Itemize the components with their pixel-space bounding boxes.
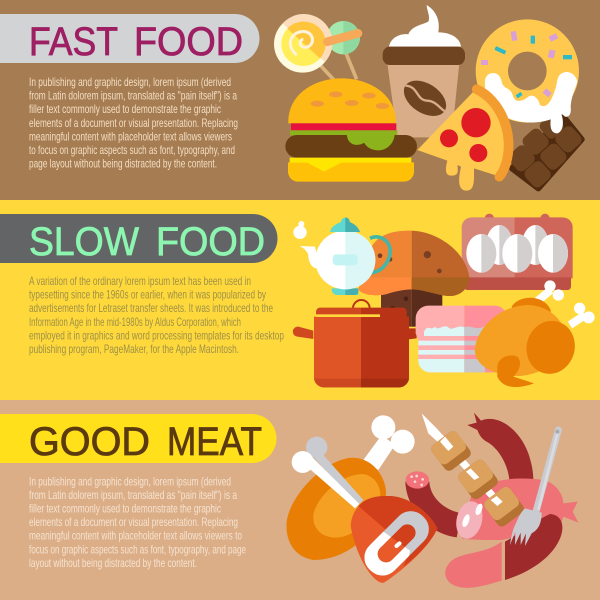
text block: slow food: [29, 274, 284, 356]
text block: fast food: to focus on graphic aspects such as font, typography, and: [29, 143, 235, 157]
text block: good meat: from Latin dolorem ipsum, translated as "pain itself") is a: [29, 488, 237, 502]
text block: slow food: typesetting since the 1960s or earlier, when it was popularized by: [29, 288, 266, 302]
heading pill: slow food: [0, 214, 278, 263]
heading: fast food: FOOD: [134, 20, 243, 64]
panel: slow food background: [0, 200, 600, 400]
illustration group: slow food: [293, 214, 595, 387]
text block: fast food: meaningful content with placeholder text allows viewers: [29, 129, 232, 143]
text block: good meat: focus on graphic aspects such as font, typography, and page: [29, 542, 246, 556]
text block: good meat: meaningful content with placeholder text allows viewers to: [29, 529, 242, 543]
text block: fast food: page layout without being distracted by the content.: [29, 157, 217, 171]
icon: donut: [476, 19, 579, 133]
heading: slow food: SLOW: [29, 220, 139, 264]
icon: kebab skewer: [422, 413, 526, 529]
icon: chocolate bar: [506, 113, 584, 190]
text block: slow food: publishing program, PageMaker, for the Apple Macintosh.: [29, 342, 239, 356]
icon: burger: [285, 78, 417, 182]
text block: fast food: elements of a document or visual presentation. Replacing: [29, 116, 238, 130]
illustration group: fast food: [274, 5, 584, 191]
heading: slow food: FOOD: [156, 220, 265, 264]
heading: fast food: [29, 20, 243, 64]
icon: cooking pot: [293, 300, 417, 387]
text block: good meat: [29, 474, 246, 570]
heading: fast food: FAST: [29, 20, 118, 64]
icon: lollipops: [274, 14, 360, 80]
icon: muffin: [359, 231, 469, 327]
icon: pink sausage and ham: [445, 479, 578, 588]
heading: good meat: GOOD: [29, 420, 150, 464]
heading pill: good meat: [0, 414, 276, 463]
text block: fast food: filler text commonly used to demonstrate the graphic: [29, 102, 221, 116]
illustration group: good meat: [286, 413, 578, 588]
icon: fork: [510, 430, 559, 546]
text block: good meat: In publishing and graphic design, lorem ipsum (derived: [29, 474, 231, 488]
panel: fast food background: [0, 0, 600, 200]
text block: fast food: [29, 75, 238, 171]
icon: salami: [405, 471, 462, 537]
text block: slow food: A variation of the ordinary lorem ipsum text has been used in: [29, 274, 251, 288]
heading: good meat: [29, 420, 262, 464]
icon: steak: [351, 496, 437, 583]
panel: good meat background: [0, 400, 600, 600]
text block: good meat: layout without being distracted by the content.: [29, 556, 197, 570]
icon: drumstick back: [286, 415, 415, 560]
icon: roast chicken: [475, 280, 595, 387]
icon: egg carton: [462, 214, 573, 290]
text block: fast food: In publishing and graphic design, lorem ipsum (derived: [29, 75, 231, 89]
icon: sausage coil: [467, 413, 533, 480]
heading: good meat: MEAT: [167, 420, 262, 464]
icon: pizza slice: [417, 89, 511, 191]
text block: fast food: from Latin dolorem ipsum, translated as "pain itself") is a: [29, 89, 237, 103]
heading: slow food: [29, 220, 265, 264]
heading pill: fast food: [0, 14, 260, 63]
text block: slow food: advertisements for Letraset transfer sheets. It was introduced to the: [29, 301, 273, 315]
text block: slow food: employed it in graphics and word processing templates for its desktop: [29, 328, 284, 342]
icon: coffee cup: [383, 5, 465, 137]
text block: slow food: Information Age in the mid-1980s by Aldus Corporation, which: [29, 315, 241, 329]
text block: good meat: elements of a document or visual presentation. Replacing: [29, 515, 238, 529]
icon: layered cake: [416, 306, 507, 372]
text block: good meat: filler text commonly used to demonstrate the graphic: [29, 502, 221, 516]
icon: teapot: [293, 217, 390, 295]
